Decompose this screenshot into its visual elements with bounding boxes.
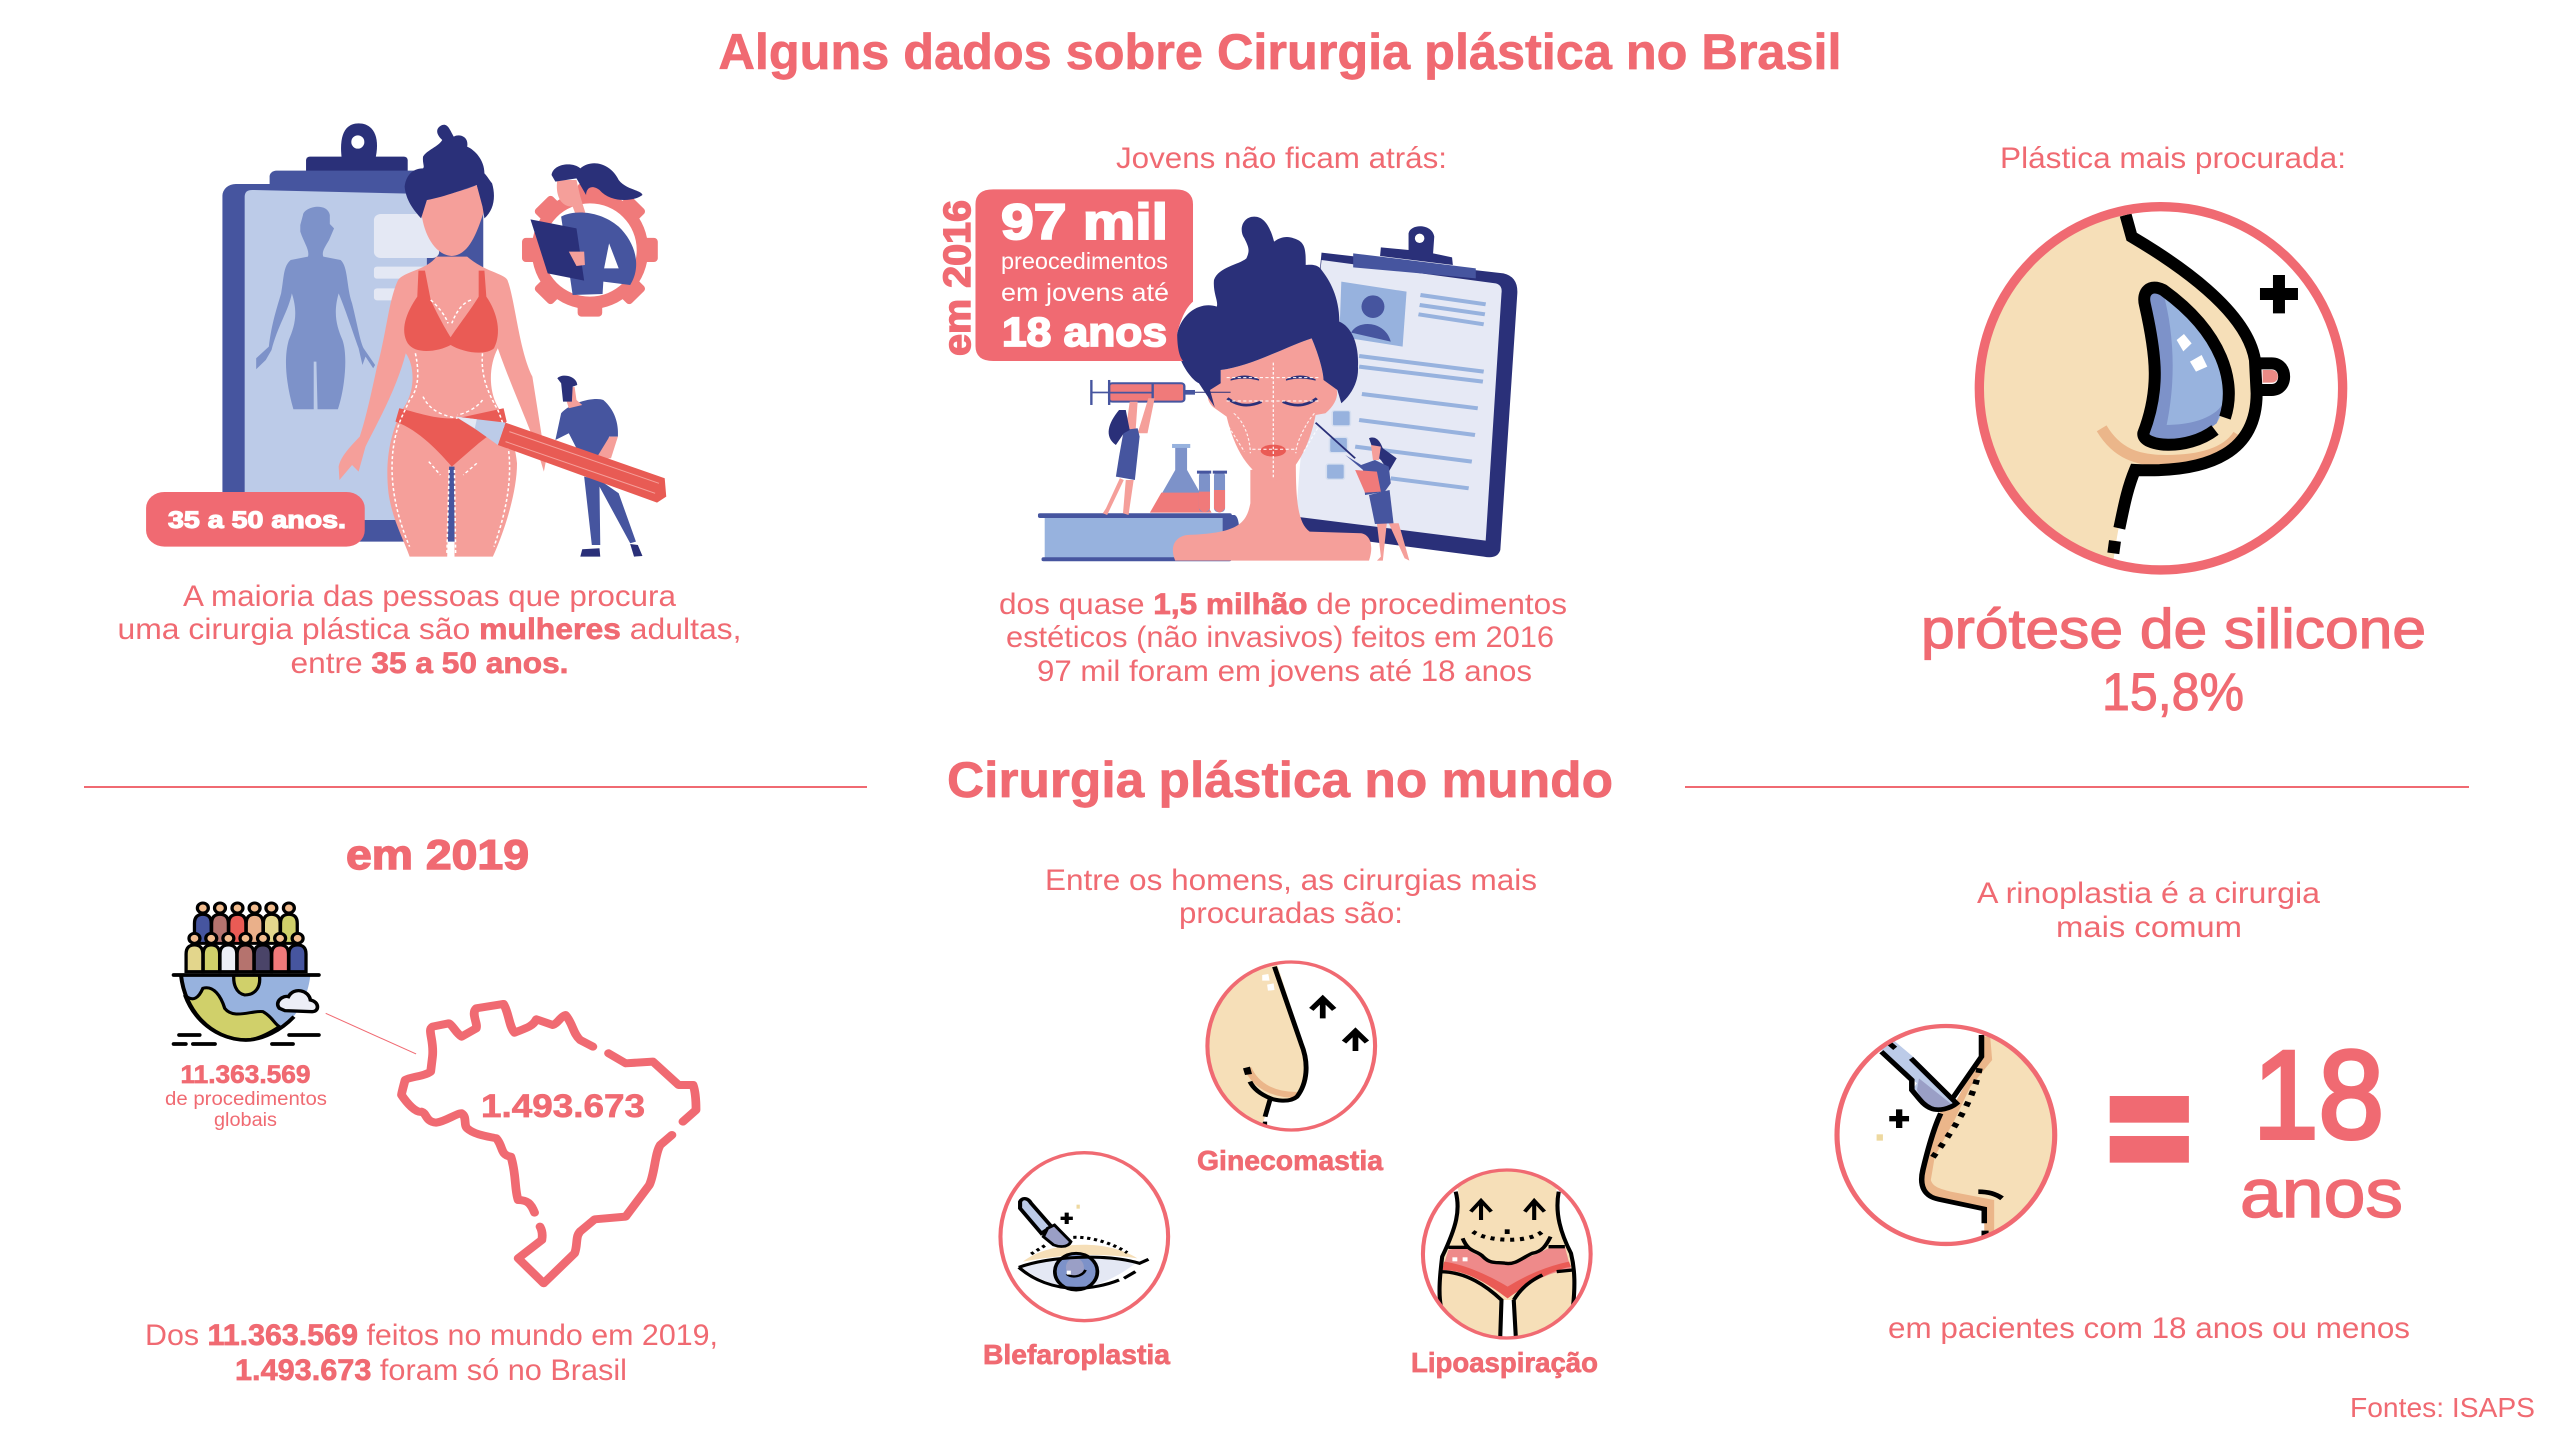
text: globais: globais (214, 1110, 277, 1131)
callout text: em 2016: em 2016 (937, 200, 979, 356)
text: 1,5 million line 2: estéticos (não invasivos) feitos em 2016 (1006, 621, 1554, 654)
pointer woman (1316, 423, 1409, 561)
icon and map: globe with people, Brazil outline (174, 903, 696, 1283)
label: Blefaroplastia: Blefaroplastia (983, 1339, 1170, 1370)
title: Alguns dados sobre Cirurgia plástica no Brasil (718, 24, 1842, 80)
hair (1177, 217, 1358, 407)
icon: rhinoplasty (1837, 1023, 2057, 1250)
equals sign (2110, 1096, 2189, 1163)
clipboard (222, 123, 483, 542)
pencil (456, 417, 666, 503)
books and flasks (1038, 444, 1239, 561)
connector line (326, 1013, 416, 1054)
97 mil callout (975, 189, 1193, 361)
syringe (1090, 380, 1231, 405)
neck and shoulders (1173, 463, 1371, 561)
number: 18: 18 (2253, 1026, 2384, 1165)
woman figure (339, 125, 546, 557)
man holding pencil (555, 376, 642, 557)
text: women adults line 2: uma cirurgia plástica são mulheres adultas, (118, 613, 742, 646)
text: Brazil number: 1.493.673 (481, 1088, 645, 1124)
text: women adults: A maioria das pessoas que procura (183, 580, 676, 613)
gear with woman holding clipboard (522, 163, 658, 317)
icon: breast implant (1960, 190, 2343, 590)
icon: gynecomastia (1205, 960, 1378, 1132)
callout text: preocedimentos: preocedimentos (1001, 248, 1168, 274)
text: 15,8%: 15,8% (2102, 663, 2244, 722)
body silhouette on chart (256, 207, 375, 409)
icon: blepharoplasty (1000, 1153, 1168, 1321)
face (1208, 338, 1337, 482)
clipboard (1296, 226, 1517, 557)
text: patients: em pacientes com 18 anos ou menos (1888, 1312, 2410, 1345)
label: Lipoaspiração: Lipoaspiração (1411, 1347, 1598, 1378)
text: 1,5 million line 3: 97 mil foram em jovens até 18 anos (1037, 655, 1532, 688)
age badge label: 35 a 50 anos. (168, 507, 346, 534)
text: rhinoplasty line 2: mais comum (2056, 911, 2242, 944)
callout text: 18 anos: 18 anos (1002, 309, 1167, 355)
text: among men line 1: Entre os homens, as cirurgias mais (1045, 864, 1537, 897)
text: world vs Brazil line 1: Dos 11.363.569 feitos no mundo em 2019, (145, 1319, 718, 1352)
illustration: face with clipboard and syringe (975, 189, 1517, 561)
label: Ginecomastia: Ginecomastia (1197, 1145, 1383, 1176)
section heading: Cirurgia plástica no mundo (947, 752, 1613, 808)
map: Brazil outline (402, 1004, 696, 1283)
text: world vs Brazil line 2: 1.493.673 foram só no Brasil (235, 1354, 627, 1387)
text: 1,5 million line 1: dos quase 1,5 milhão de procedimentos (999, 588, 1567, 621)
icon: liposuction (1423, 1170, 1591, 1347)
facial features (1227, 363, 1320, 478)
text: among men line 2: procuradas são: (1179, 897, 1403, 930)
callout text: 97 mil: 97 mil (1001, 194, 1168, 250)
section dividers (84, 786, 2469, 788)
source note: Fontes: ISAPS (2350, 1392, 2535, 1423)
heading: em 2019: em 2019 (346, 831, 529, 878)
heading: young people: Jovens não ficam atrás: (1116, 142, 1447, 175)
text: prótese de silicone: prótese de silicone (1921, 597, 2426, 660)
label: anos: anos (2240, 1155, 2403, 1232)
text: women adults line 3: entre 35 a 50 anos. (290, 647, 568, 680)
text: de procedimentos: de procedimentos (165, 1089, 327, 1110)
icon: globe with people (174, 903, 319, 1044)
woman lifting syringe (1103, 398, 1155, 515)
age badge (146, 492, 365, 547)
illustration: woman body with clipboard and surgeons (146, 123, 666, 557)
heading: most sought: Plástica mais procurada: (2000, 142, 2346, 175)
callout text: em jovens até: em jovens até (1001, 279, 1169, 307)
text: rhinoplasty line 1: A rinoplastia é a cirurgia (1977, 877, 2320, 910)
text: global procedures number: 11.363.569 (180, 1061, 310, 1089)
